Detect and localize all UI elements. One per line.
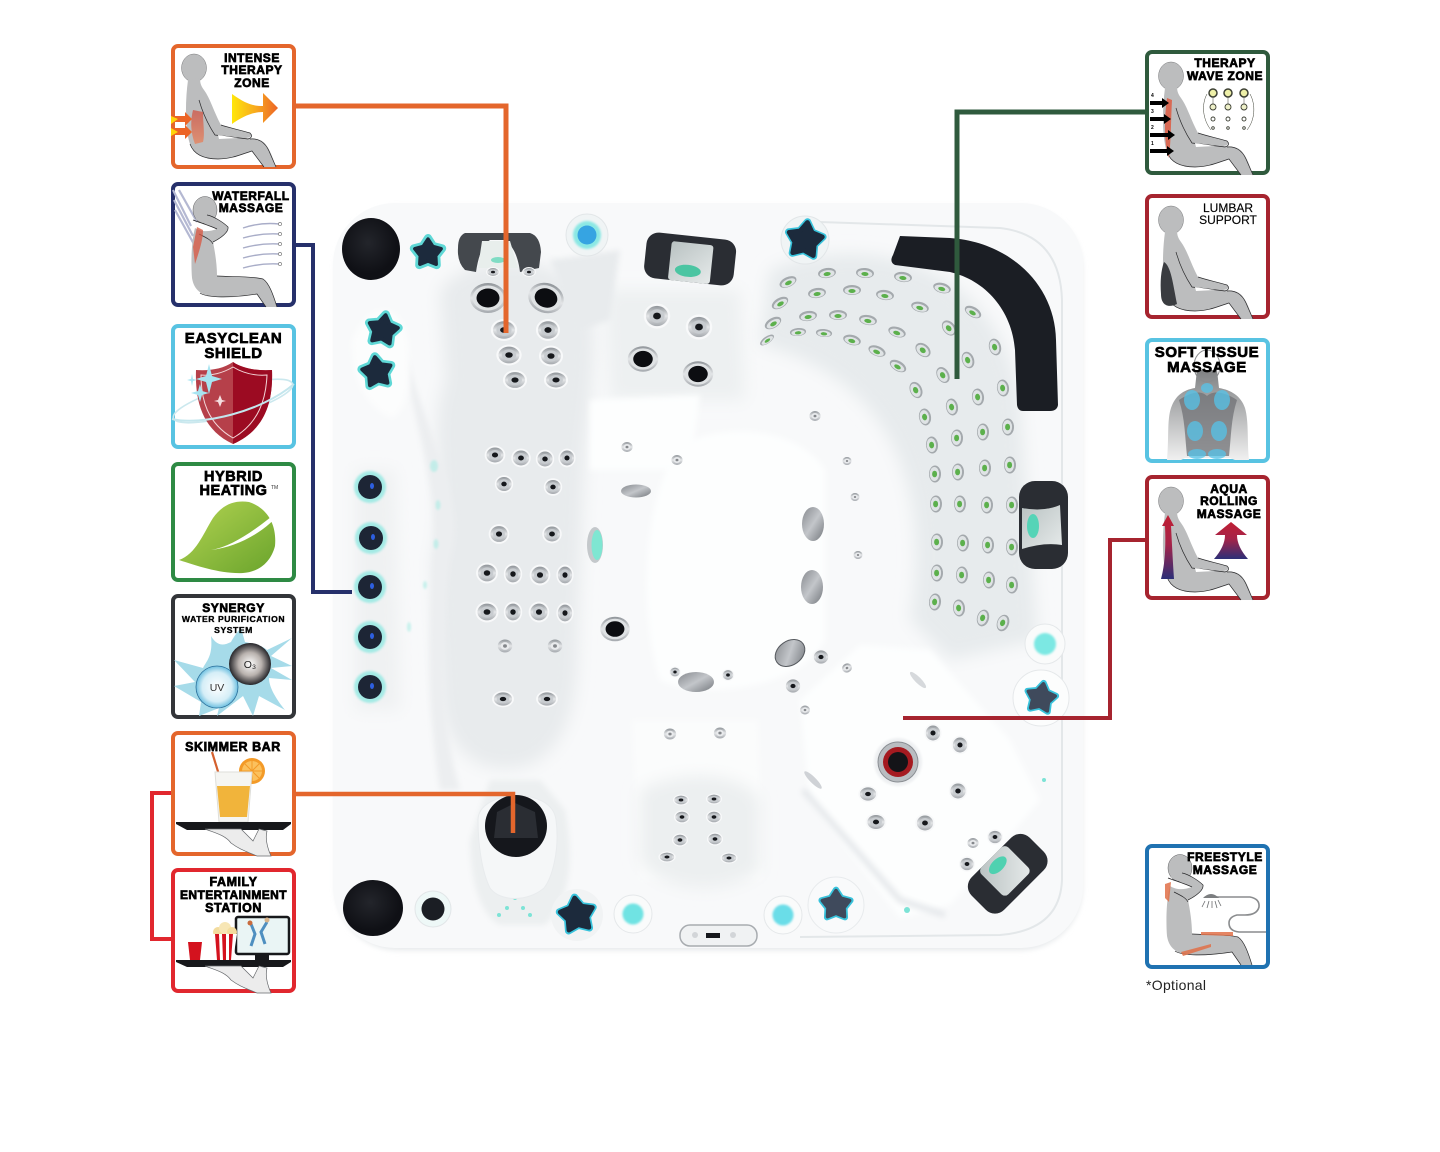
lounger jets bbox=[802, 670, 1003, 872]
panel: easyclean shield bbox=[170, 326, 296, 447]
soft drink bbox=[188, 942, 202, 960]
heading: ENTERTAINMENT bbox=[180, 888, 287, 902]
panel: freestyle massage bbox=[1147, 846, 1268, 967]
panel: hybrid heating bbox=[173, 464, 294, 580]
top seat jets bbox=[600, 303, 713, 641]
jet streams bbox=[243, 222, 282, 268]
heading: SYSTEM bbox=[214, 625, 253, 635]
muscular back bbox=[1167, 350, 1249, 460]
heading: MASSAGE bbox=[1167, 359, 1247, 376]
hot tub top view bbox=[333, 203, 1083, 950]
left seat jets bbox=[470, 267, 576, 707]
heading: HEATING bbox=[199, 483, 268, 499]
panel: synergy water purification bbox=[173, 596, 294, 717]
moulded seat surfaces bbox=[352, 250, 1040, 925]
lumbar heat zone bbox=[191, 110, 204, 144]
seated figure bbox=[1158, 206, 1253, 319]
seated figure, arms raised bbox=[191, 196, 277, 307]
numbered arrows bbox=[1150, 93, 1175, 156]
optional note: *Optional bbox=[1146, 977, 1206, 993]
metal valves and nozzles bbox=[621, 411, 862, 740]
monitor bbox=[236, 917, 289, 960]
heading: HYBRID bbox=[204, 469, 263, 485]
seated figure, arm raised bbox=[1166, 854, 1252, 965]
connector: waterfall massage bbox=[296, 245, 352, 592]
heading: STATION bbox=[205, 901, 262, 915]
corner mounds bbox=[342, 218, 451, 936]
UV sphere: UV bbox=[210, 682, 224, 694]
water splash bbox=[174, 628, 292, 716]
tray bbox=[176, 822, 291, 830]
water feature lights, left rail bbox=[354, 460, 440, 703]
back arrow bbox=[1161, 515, 1174, 579]
heading: SHIELD bbox=[204, 345, 263, 362]
straw bbox=[212, 752, 224, 791]
jet columns bbox=[1204, 89, 1254, 130]
heading: WATERFALL bbox=[212, 189, 290, 203]
heading: EASYCLEAN bbox=[185, 330, 282, 347]
tub shell bbox=[333, 203, 1083, 950]
sparkles bbox=[187, 364, 226, 407]
waterfall streams bbox=[173, 190, 197, 246]
panel: soft tissue massage bbox=[1147, 340, 1268, 461]
connector: aqua rolling massage bbox=[903, 540, 1146, 718]
heat arrows into back bbox=[171, 112, 192, 139]
heading: SKIMMER BAR bbox=[185, 740, 281, 754]
pillow: right side bbox=[1019, 481, 1068, 569]
panel: therapy wave zone bbox=[1147, 52, 1268, 175]
heading: ZONE bbox=[234, 76, 270, 90]
hand bbox=[205, 829, 271, 856]
skimmer bbox=[478, 795, 557, 898]
numbered arrows: 2 bbox=[1151, 125, 1154, 131]
heading: WAVE ZONE bbox=[1187, 69, 1263, 83]
massage zones bbox=[1184, 383, 1230, 459]
popcorn bbox=[213, 922, 237, 960]
heading: THERAPY bbox=[221, 63, 283, 77]
control panel bbox=[680, 925, 757, 946]
heading: LUMBAR bbox=[1203, 201, 1253, 215]
orbit ring, back half bbox=[170, 370, 296, 432]
hand bbox=[205, 966, 271, 993]
panel: waterfall massage bbox=[173, 184, 294, 307]
heading: MASSAGE bbox=[219, 201, 283, 215]
panel: hybrid heating: TM bbox=[271, 485, 278, 491]
pillow: top left bbox=[458, 233, 541, 272]
panel: intense therapy zone bbox=[171, 46, 294, 167]
footwell seat jets bbox=[658, 794, 738, 864]
heading: WATER PURIFICATION bbox=[182, 614, 285, 624]
curved neck headrest bbox=[891, 236, 1058, 411]
shield icon bbox=[196, 362, 272, 444]
connector: family entertainment station bbox=[152, 793, 172, 939]
panel: lumbar support bbox=[1147, 196, 1268, 319]
heading: THERAPY bbox=[1194, 56, 1256, 70]
numbered arrows: 3 bbox=[1151, 109, 1154, 115]
pillow: top centre bbox=[643, 231, 737, 287]
heading: AQUA bbox=[1210, 482, 1248, 496]
pillow: corner seat bbox=[962, 828, 1053, 919]
therapy wave green jets bbox=[758, 267, 1018, 633]
heading: SUPPORT bbox=[1199, 213, 1258, 227]
back heat zone bbox=[1165, 98, 1172, 158]
seated figure bbox=[1158, 62, 1253, 175]
heading: FAMILY bbox=[210, 875, 258, 889]
connector: therapy wave zone bbox=[957, 112, 1146, 379]
heading: INTENSE bbox=[224, 51, 280, 65]
heading: MASSAGE bbox=[1193, 863, 1257, 877]
panel: aqua rolling massage bbox=[1147, 477, 1268, 600]
seated figure bbox=[182, 54, 276, 167]
drink glass bbox=[215, 772, 252, 822]
numbered arrows: 1 bbox=[1151, 141, 1154, 147]
tray bbox=[176, 960, 291, 967]
star controls bbox=[360, 216, 1069, 941]
O3 sphere: O₃ bbox=[244, 659, 256, 671]
leaf icon bbox=[179, 502, 289, 573]
heading: SYNERGY bbox=[202, 601, 265, 615]
connector: intense therapy zone bbox=[296, 106, 506, 333]
orbit ring, front arc bbox=[172, 384, 294, 421]
heading: ROLLING bbox=[1200, 494, 1258, 508]
heat zones bbox=[1165, 882, 1233, 956]
heading: MASSAGE bbox=[1197, 507, 1261, 521]
connector: skimmer bar bbox=[296, 794, 513, 833]
heat arrow bbox=[232, 93, 278, 124]
orange slice bbox=[239, 758, 265, 784]
lumbar cushion bbox=[1161, 262, 1177, 306]
seated figure bbox=[1158, 487, 1253, 600]
heading: FREESTYLE bbox=[1187, 850, 1263, 864]
shower wand and hose bbox=[1202, 894, 1266, 932]
panel: family entertainment station bbox=[173, 870, 294, 993]
rising arrow bbox=[1214, 522, 1248, 559]
round lens lights bbox=[497, 214, 1065, 934]
heading: SOFT TISSUE bbox=[1155, 344, 1259, 361]
panel: skimmer bar bbox=[173, 733, 294, 856]
neck heat zone bbox=[193, 227, 203, 264]
numbered arrows: 4 bbox=[1151, 93, 1154, 99]
